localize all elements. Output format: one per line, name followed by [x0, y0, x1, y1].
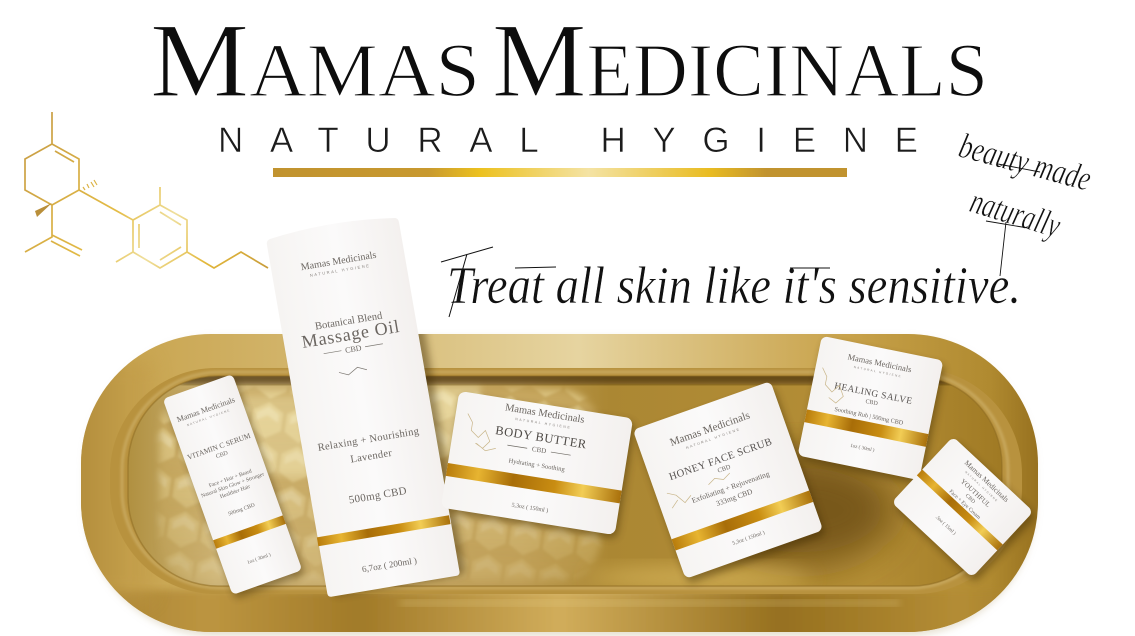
tagline: treat all skin: Treat all skin like it's sensitive.: [447, 255, 1021, 315]
product: honey face scrub: [633, 381, 823, 579]
product: healing salve: [798, 336, 943, 480]
title: MAMAS: [150, 2, 480, 119]
label text: NATURAL HYGIENE: [309, 263, 371, 278]
tray rim: [81, 334, 1038, 632]
label text: CBD: [964, 493, 976, 505]
label text: BODY BUTTER: [494, 423, 588, 451]
label text: Healthier Hair: [219, 484, 251, 500]
label text: NATURAL HYGIENE: [686, 427, 741, 450]
label text: Exfoliating + Rejuvenating: [690, 469, 771, 505]
label text: CBD: [215, 450, 230, 460]
gold band: [672, 491, 813, 551]
label text: YOUTHFUL: [959, 477, 992, 509]
product: youthful eye cream: [892, 437, 1033, 577]
label text: NATURAL HYGIENE: [186, 408, 231, 427]
label text: NATURAL HYGIENE: [853, 365, 902, 379]
label text: 6,7oz ( 200ml ): [361, 555, 418, 574]
gold band: [917, 469, 1003, 550]
label text: Mamas Medicinals: [847, 352, 912, 374]
label text: Mamas Medicinals: [963, 458, 1011, 504]
label text: Mamas Medicinals: [300, 250, 377, 273]
label text: Face + Eye Cream: [948, 489, 982, 521]
label text: 1oz ( 30ml ): [247, 553, 272, 566]
label text: .5oz ( 15ml ): [934, 515, 957, 537]
gold band: [317, 515, 451, 546]
label text: Massage Oil: [300, 316, 401, 352]
title: [150, 2, 988, 119]
label text: Soothing Rub | 500mg CBD: [834, 406, 904, 427]
hammered texture: [150, 385, 630, 585]
label text: [922, 458, 1011, 547]
label text: Face + Hair + Beard: [208, 468, 253, 489]
label text: NATURAL HYGIENE: [964, 470, 999, 503]
tray inner edge: [110, 368, 1022, 594]
label text: Mamas Medicinals: [668, 409, 752, 449]
label text: NATURAL HYGIENE: [515, 417, 572, 430]
label text: 500mg CBD: [227, 502, 256, 517]
label text: CBD: [344, 343, 362, 355]
label text: 333mg CBD: [715, 487, 754, 508]
label text: Botanical Blend: [314, 310, 384, 333]
label text: 5,3oz ( 150ml ): [731, 529, 766, 547]
tray floor: [128, 376, 1002, 586]
label text: Relaxing + Nourishing: [317, 426, 420, 454]
icon: cannabinoid molecule: [25, 112, 268, 268]
tagline: beauty made naturally: beauty made: [955, 127, 1095, 199]
gold divider bar: [273, 168, 847, 177]
label text: HONEY FACE SCRUB: [668, 436, 774, 483]
label text: Lavender: [350, 448, 393, 466]
title: MEDICINALS: [492, 2, 988, 119]
product: massage oil: [265, 213, 460, 598]
label text: Natural Skin Glow + Stronger: [201, 471, 265, 499]
product: vitamin C serum: [163, 374, 302, 595]
label text: CBD: [865, 399, 879, 407]
label text: [287, 247, 441, 578]
product: body butter: [441, 391, 633, 535]
gold band: [446, 463, 622, 503]
panel: gold tray: [60, 334, 1060, 636]
label text: [173, 394, 292, 573]
tagline: beauty made naturally: naturally: [966, 182, 1065, 246]
gold band: [804, 409, 928, 447]
label text: Mamas Medicinals: [176, 395, 236, 424]
label text: [808, 347, 920, 459]
gold band: [213, 515, 286, 549]
tagline: beauty made naturally: [955, 127, 1095, 276]
label text: 1oz ( 30ml ): [850, 444, 875, 454]
label text: HEALING SALVE: [833, 381, 913, 407]
label text: CBD: [717, 464, 732, 475]
tagline: treat all skin: [441, 247, 1021, 317]
label text: VITAMIN C SERUM: [186, 431, 252, 462]
product shadows: [164, 334, 1036, 601]
tray shadow: [85, 338, 1035, 636]
label text: Mamas Medicinals: [504, 402, 585, 426]
label text: CBD: [531, 445, 547, 455]
label text: 500mg CBD: [348, 485, 408, 506]
subtitle: NATURAL HYGIENE: [218, 121, 918, 160]
label text: Hydrating + Soothing: [508, 458, 566, 473]
label text: [650, 405, 801, 562]
label text: [454, 397, 591, 519]
label text: 5,3oz ( 150ml ): [511, 502, 549, 514]
